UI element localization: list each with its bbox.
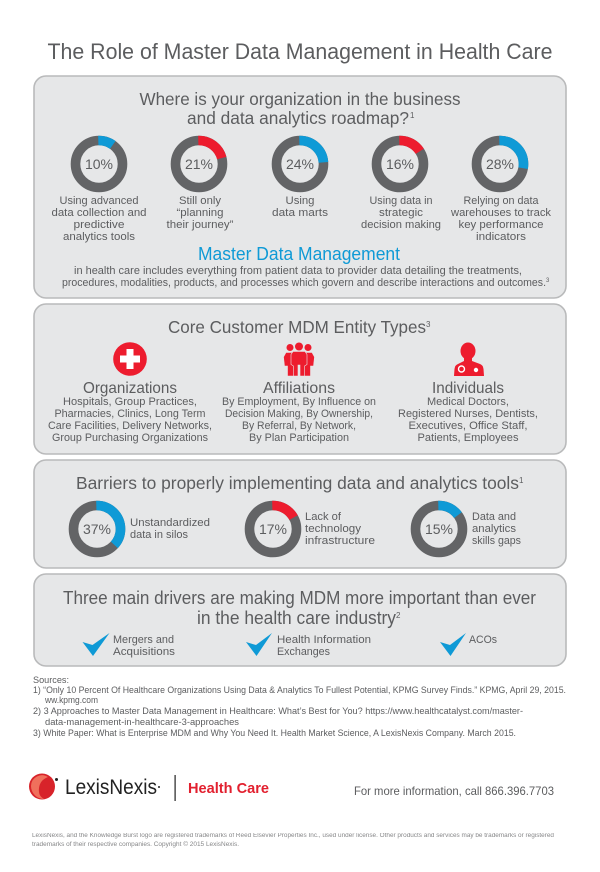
label: mergers xyxy=(113,634,176,658)
heading: entity types: Core Customer MDM Entity Types xyxy=(168,317,426,337)
label: mergers: Acquisitions xyxy=(113,646,176,658)
text: sources xyxy=(33,675,566,738)
column: individuals: Registered Nurses, Dentists, xyxy=(398,408,538,420)
label: technology infrastructure: Lack of xyxy=(305,511,342,523)
column: individuals xyxy=(398,380,538,444)
column: organizations: Hospitals, Group Practices, xyxy=(63,396,197,408)
column: affiliations xyxy=(222,380,376,444)
text: definition: in health care includes everything from patient data to provider data detailing the treatments, xyxy=(74,265,522,277)
panel: analytics roadmap xyxy=(34,76,566,298)
text: sources: ww.kpmg.com xyxy=(44,695,98,705)
column: individuals: Patients, Employees xyxy=(418,432,519,444)
label: strategic decisions: decision making xyxy=(361,219,441,231)
icon: group of people xyxy=(284,342,314,376)
label: data warehouses: Relying on data xyxy=(464,195,538,207)
label: skills gaps: analytics xyxy=(472,523,517,535)
label: advanced analytics: Using advanced xyxy=(60,195,138,207)
column: affiliations: By Plan Participation xyxy=(249,432,349,444)
icon: check mergers xyxy=(82,633,110,656)
logo: LexisNexis Health Care: LexisNexis xyxy=(65,776,157,799)
label: advanced analytics: predictive xyxy=(74,219,124,231)
label: exchanges xyxy=(277,634,371,658)
label: strategic decisions xyxy=(361,195,441,231)
column: organizations: Organizations xyxy=(83,380,177,397)
label: unstandardized data: data in silos xyxy=(130,529,189,541)
label: planning: their journey” xyxy=(166,219,234,231)
text: sources: Sources: xyxy=(33,675,69,685)
text: contact: For more information, call 866.396.7703 xyxy=(354,784,554,798)
label: ACOs: ACOs xyxy=(469,634,498,646)
label: strategic decisions: Using data in xyxy=(370,195,432,207)
donut: 21% xyxy=(176,140,222,188)
heading: entity types: 3 xyxy=(426,320,431,329)
label: mergers: Mergers and xyxy=(113,634,174,646)
column: affiliations: Decision Making, By Ownership, xyxy=(225,408,373,420)
icon: medical cross xyxy=(113,342,147,376)
column: affiliations: By Employment, By Influence on xyxy=(222,396,376,408)
donut: 28%: 28% xyxy=(486,156,514,172)
label: data marts: data marts xyxy=(272,207,329,219)
donut: 28% xyxy=(476,140,524,188)
text: definition: procedures, modalities, products, and processes which govern and describe interactions and outcomes. xyxy=(62,277,546,289)
label: data warehouses: indicators xyxy=(476,231,527,243)
donut: 17%: 17% xyxy=(259,521,287,537)
donut: 10% xyxy=(76,140,122,188)
heading: barriers: Barriers to properly implementing data and analytics tools xyxy=(76,473,519,493)
heading: master data management: Master Data Management xyxy=(198,244,400,264)
column: individuals: Individuals xyxy=(432,380,504,397)
heading: drivers: 2 xyxy=(396,611,401,620)
label: planning xyxy=(166,195,234,231)
label: skills gaps: Data and xyxy=(472,511,516,523)
heading: roadmap: Where is your organization in the business xyxy=(140,89,461,109)
heading: barriers: 1 xyxy=(519,476,524,485)
column: individuals: Executives, Office Staff, xyxy=(408,420,528,432)
label: data warehouses xyxy=(450,195,552,243)
donut: 37%: 37% xyxy=(83,521,111,537)
heading: roadmap: 1 xyxy=(410,111,415,120)
text: sources: 2) 3 Approaches to Master Data Management in Healthcare: What’s Best for You? https://www.healthcatalyst.com/master- xyxy=(33,706,523,716)
label: unstandardized data xyxy=(130,517,210,541)
label: data marts: Using xyxy=(286,195,314,207)
icon: doctor xyxy=(454,342,484,376)
label: data marts xyxy=(272,195,329,219)
column: affiliations: By Referral, By Network, xyxy=(242,420,356,432)
logo: LexisNexis Health Care: Health Care xyxy=(188,780,269,797)
text: sources: 1) “Only 10 Percent Of Healthcare Organizations Using Data & Analytics To Fullest Potential, KPMG Survey Finds.” KPMG, April 29, 2015. xyxy=(33,685,566,695)
column: organizations: Care Facilities, Delivery Networks, xyxy=(48,420,212,432)
text: definition xyxy=(62,265,550,289)
donut: 16% xyxy=(376,140,424,188)
label: exchanges: Health Information xyxy=(277,634,371,646)
label: skills gaps: skills gaps xyxy=(472,535,522,547)
text: definition: 3 xyxy=(546,278,550,284)
text: sources: 3) White Paper: What is Enterprise MDM and Why You Need It. Health Market Science, A LexisNexis Company. March 2015. xyxy=(33,728,516,738)
column: organizations: Group Purchasing Organizations xyxy=(52,432,209,444)
donut: 24% xyxy=(276,140,324,188)
donut: 37% xyxy=(74,506,120,552)
heading: drivers: Three main drivers are making MDM more important than ever xyxy=(63,588,536,608)
heading: roadmap: and data analytics roadmap? xyxy=(187,108,409,128)
title: The Role of Master Data Management in Health Care xyxy=(48,39,552,64)
column: organizations: Pharmacies, Clinics, Long Term xyxy=(54,408,206,420)
donut: 17% xyxy=(250,506,296,552)
label: unstandardized data: Unstandardized xyxy=(130,517,210,529)
heading: roadmap xyxy=(140,89,461,128)
donut: 15% xyxy=(416,506,462,552)
label: technology infrastructure: infrastructure xyxy=(305,535,375,547)
heading: drivers xyxy=(63,588,536,628)
label: strategic decisions: strategic xyxy=(379,207,424,219)
label: planning: “planning xyxy=(176,207,224,219)
label: advanced analytics: data collection and xyxy=(52,207,146,219)
column: individuals: Medical Doctors, xyxy=(427,396,509,408)
label: advanced analytics xyxy=(52,195,146,243)
donut: 24%: 24% xyxy=(286,156,314,172)
label: data warehouses: key performance xyxy=(458,219,544,231)
label: data warehouses: warehouses to track xyxy=(450,207,552,219)
heading: drivers: in the health care industry xyxy=(197,608,396,628)
donut: 16%: 16% xyxy=(386,156,414,172)
panel: drivers xyxy=(34,574,566,666)
text: legal footer xyxy=(32,833,554,848)
icon: check exchanges xyxy=(246,633,272,656)
label: technology infrastructure: technology xyxy=(305,523,362,535)
column: organizations xyxy=(48,380,212,444)
label: skills gaps xyxy=(472,511,522,547)
text: sources: data-management-in-healthcare-3-approaches xyxy=(45,717,239,727)
donut: 21%: 21% xyxy=(185,156,213,172)
label: exchanges: Exchanges xyxy=(277,646,331,658)
text: legal footer: trademarks of their respective companies. Copyright © 2015 LexisNexis. xyxy=(32,841,239,848)
panel: barriers xyxy=(34,460,566,568)
logo: LexisNexis Health Care xyxy=(29,774,269,801)
donut: 10%: 10% xyxy=(85,156,113,172)
panel: entity types xyxy=(34,304,566,454)
column: affiliations: Affiliations xyxy=(263,380,335,397)
icon: check ACOs xyxy=(440,633,466,656)
label: advanced analytics: analytics tools xyxy=(63,231,136,243)
label: technology infrastructure xyxy=(305,511,375,547)
text: legal footer: LexisNexis, and the Knowledge Burst logo are registered trademarks of Reed Elsevier Properties Inc., used under license. Other products and services may be trademarks or registered xyxy=(32,833,554,839)
donut: 15%: 15% xyxy=(425,521,453,537)
label: planning: Still only xyxy=(179,195,222,207)
